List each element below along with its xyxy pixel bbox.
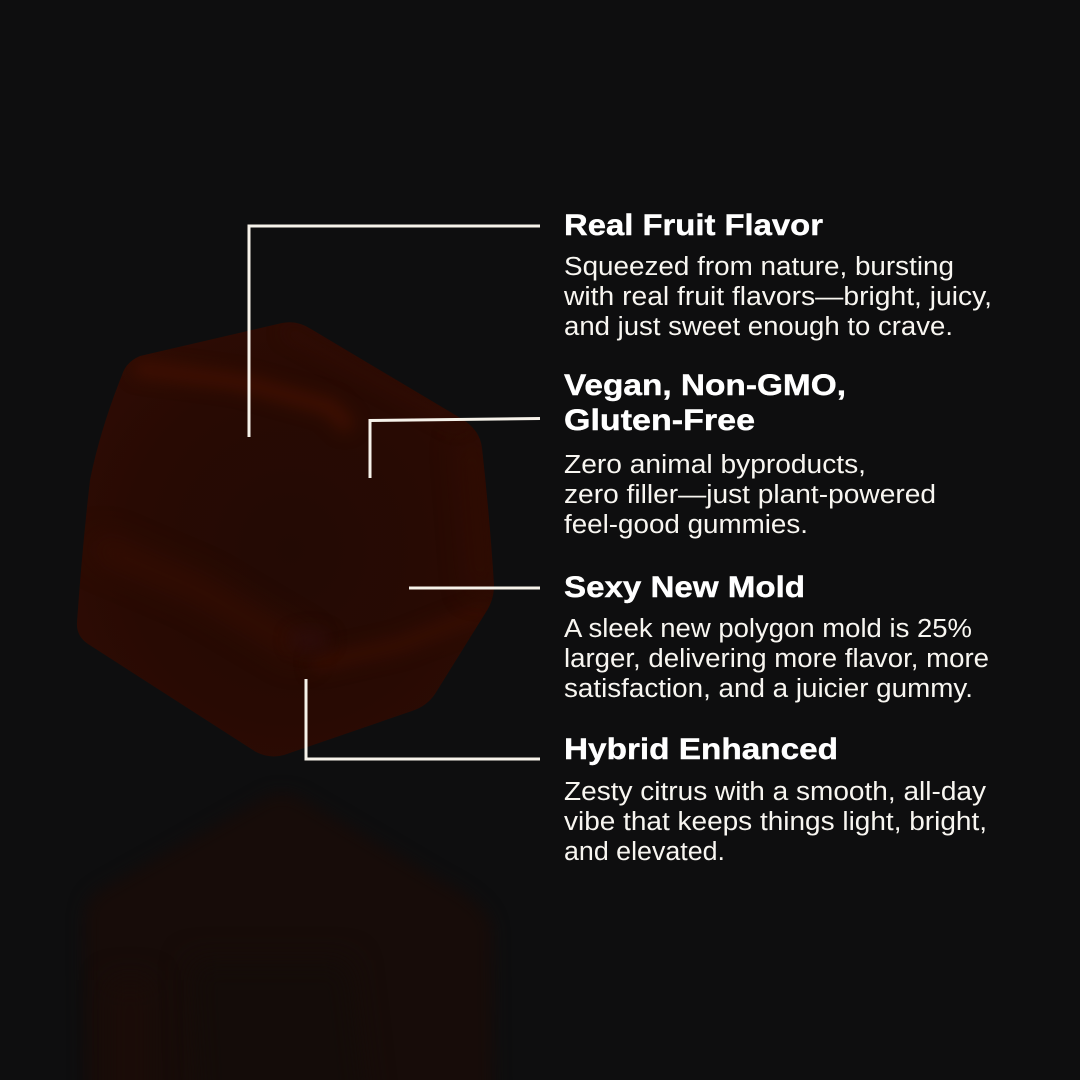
heading: Hybrid Enhanced xyxy=(564,733,838,766)
description: and elevated. xyxy=(564,838,725,866)
description: larger, delivering more flavor, more xyxy=(564,645,989,673)
description: satisfaction, and a juicier gummy. xyxy=(564,675,973,703)
description: zero filler—just plant-powered xyxy=(564,481,936,509)
description xyxy=(564,778,987,866)
feature: vegan, non-gmo, gluten-free xyxy=(564,369,936,539)
feature: hybrid enhanced xyxy=(564,733,987,866)
description: with real fruit flavors—bright, juicy, xyxy=(563,283,992,311)
callout line: sexy new mold xyxy=(409,586,540,590)
description xyxy=(564,615,989,703)
description xyxy=(564,451,936,539)
description: Squeezed from nature, bursting xyxy=(564,253,954,281)
infographic canvas xyxy=(77,213,990,1080)
callout line: vegan, non-gmo, gluten-free xyxy=(370,418,540,478)
gummy reflection xyxy=(84,793,494,1080)
feature: real fruit flavor xyxy=(563,209,992,341)
description: feel-good gummies. xyxy=(564,511,808,539)
description: Zesty citrus with a smooth, all-day xyxy=(564,778,986,806)
heading xyxy=(564,369,846,437)
heading: Real Fruit Flavor xyxy=(564,209,823,242)
heading: Gluten-Free xyxy=(564,404,755,437)
callout line: real fruit flavor xyxy=(249,226,540,437)
description xyxy=(563,253,992,341)
heading: Vegan, Non-GMO, xyxy=(564,369,846,402)
description: and just sweet enough to crave. xyxy=(564,313,953,341)
gummy xyxy=(77,322,494,756)
description: Zero animal byproducts, xyxy=(564,451,866,479)
description: vibe that keeps things light, bright, xyxy=(564,808,987,836)
callout line: hybrid enhanced xyxy=(306,679,540,759)
description: A sleek new polygon mold is 25% xyxy=(564,615,972,643)
feature: sexy new mold xyxy=(564,571,989,703)
heading: Sexy New Mold xyxy=(564,571,805,604)
